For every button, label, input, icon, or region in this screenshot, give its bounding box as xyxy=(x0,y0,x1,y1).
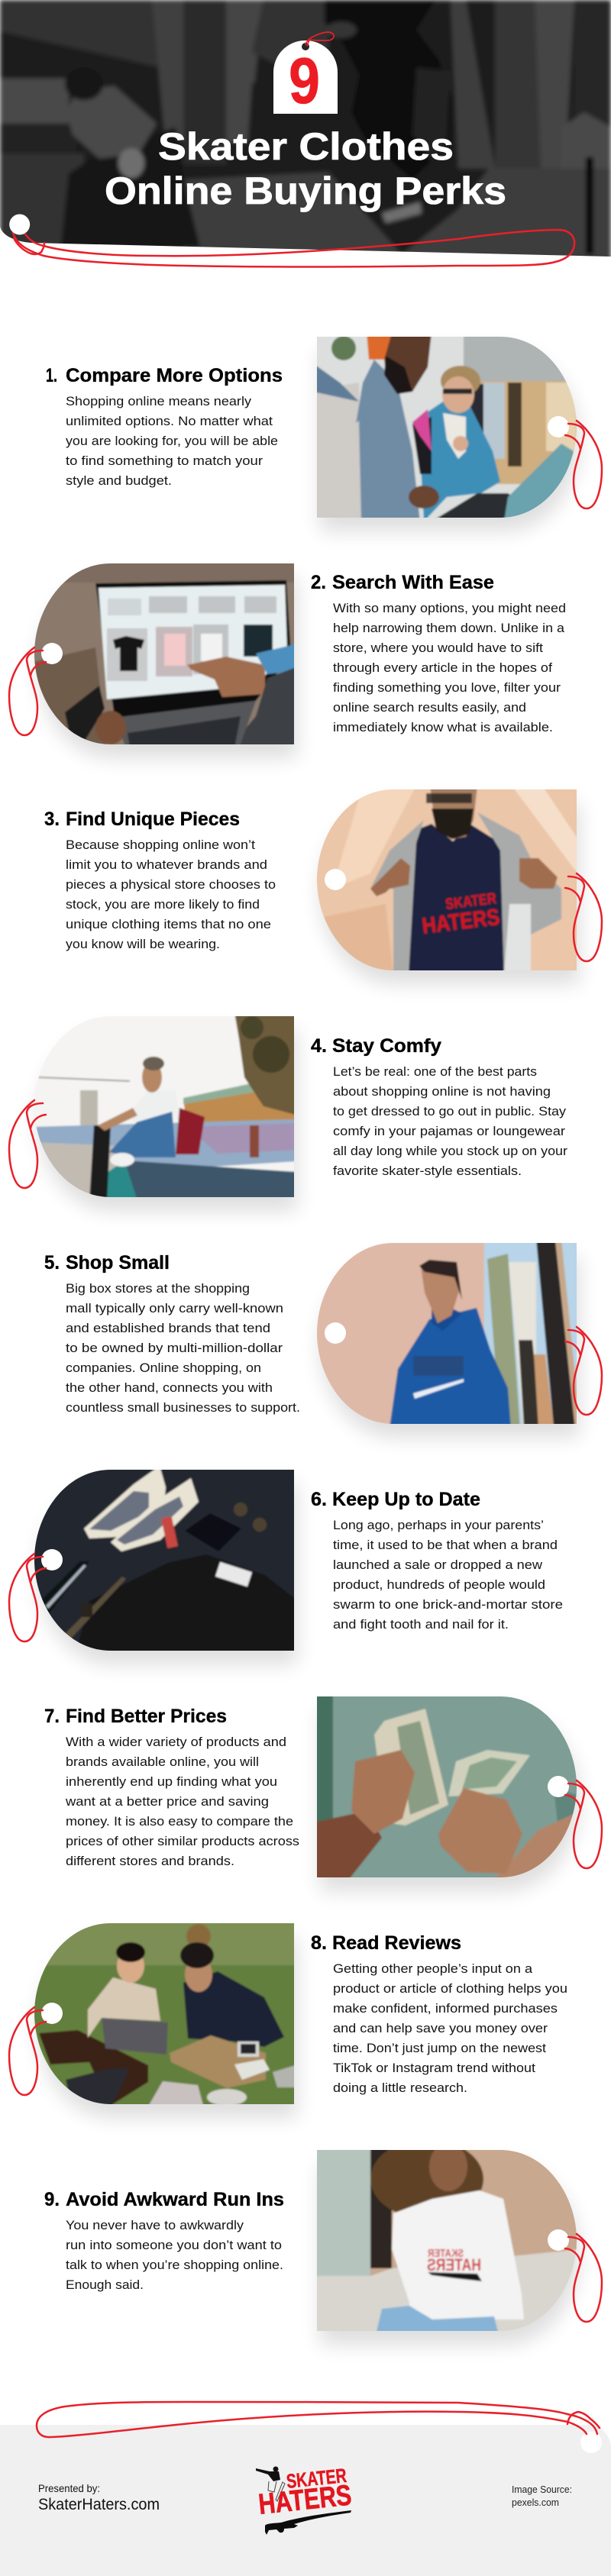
body text 6: swarm to one brick-and-mortar store xyxy=(333,1597,563,1612)
heading 7: Find Better Prices xyxy=(66,1706,227,1727)
section 7: find better prices xyxy=(44,1693,602,1891)
heading 2: 2. xyxy=(311,572,326,593)
body text 5: and established brands that tend xyxy=(66,1321,270,1335)
footer red string loop xyxy=(37,2402,600,2437)
hole 8 xyxy=(41,2003,63,2024)
body text 4: all day long while you stock up on your xyxy=(333,1144,567,1158)
body text 8: and can help save you money over xyxy=(333,2021,548,2035)
hole 2 xyxy=(41,643,63,664)
hole 5 xyxy=(325,1322,346,1344)
body text 1: you are looking for, you will be able xyxy=(66,434,278,448)
heading 5: 5. xyxy=(44,1252,60,1273)
price tag with number 9 xyxy=(273,32,338,118)
body text 5: mall typically only carry well-known xyxy=(66,1301,283,1315)
section 5: shop small xyxy=(44,1239,602,1438)
heading 4: Stay Comfy xyxy=(332,1035,441,1057)
body text 5 xyxy=(66,1281,300,1415)
body text 5: countless small businesses to support. xyxy=(66,1400,300,1415)
body text 4: to get dressed to go out in public. Stay xyxy=(333,1104,567,1119)
string 3 xyxy=(565,873,602,961)
body text 8: product or article of clothing helps you xyxy=(333,1981,567,1996)
header photo: skaters under a bridge xyxy=(0,0,611,262)
body text 3 xyxy=(66,838,276,951)
photo tag 4: skater sitting at skatepark xyxy=(9,1012,298,1211)
hole 9 xyxy=(548,2229,569,2251)
body text 8 xyxy=(333,1961,567,2095)
heading 7: 7. xyxy=(44,1706,60,1727)
body text 3: you know will be wearing. xyxy=(66,937,220,951)
body text 2: help narrowing them down. Unlike in a xyxy=(333,621,565,635)
body text 3: stock, you are more likely to find xyxy=(66,897,260,912)
body text 5: the other hand, connects you with xyxy=(66,1380,273,1395)
heading 1: Compare More Options xyxy=(66,365,283,386)
photo tag 1: two people shopping on a laptop xyxy=(313,333,602,531)
photo tag 7: hands holding cash xyxy=(313,1693,602,1891)
string 7 xyxy=(565,1780,602,1868)
body text 2 xyxy=(333,601,566,734)
heading 9: Avoid Awkward Run Ins xyxy=(66,2189,284,2210)
section 9: avoid awkward run ins xyxy=(44,2139,602,2345)
title: Skater Clothes xyxy=(158,125,454,168)
hole 1 xyxy=(548,416,569,437)
photo tag 3: man opening hoodie to show tee xyxy=(313,786,602,984)
footer panel xyxy=(0,2425,611,2576)
logo: Skater Haters: SKATER xyxy=(285,2464,348,2493)
body text 4: Let’s be real: one of the best parts xyxy=(333,1064,537,1079)
body text 8: make confident, informed purchases xyxy=(333,2001,558,2016)
heading 4: 4. xyxy=(311,1035,327,1057)
body text 6: and fight tooth and nail for it. xyxy=(333,1617,509,1632)
body text 7: want at a better price and saving xyxy=(65,1794,269,1809)
body text 9: Enough said. xyxy=(66,2277,144,2292)
body text 5: Big box stores at the shopping xyxy=(66,1281,250,1296)
heading 6: 6. xyxy=(311,1489,327,1510)
body text 4 xyxy=(333,1064,567,1178)
string 9 xyxy=(565,2234,602,2322)
image source xyxy=(512,2484,572,2508)
string 6 xyxy=(9,1554,46,1641)
body text 9: You never have to awkwardly xyxy=(66,2218,244,2232)
section 2: search with ease xyxy=(9,560,566,758)
body text 7: different stores and brands. xyxy=(66,1854,234,1868)
heading 5: Shop Small xyxy=(66,1252,170,1273)
photo tag 9: woman in white hoodie: HATERS xyxy=(427,2255,481,2274)
body text 1: to find something to match your xyxy=(66,454,263,468)
body text 3: Because shopping online won’t xyxy=(66,838,255,852)
body text 4: favorite skater-style essentials. xyxy=(333,1164,522,1178)
hole 7 xyxy=(548,1776,569,1797)
title xyxy=(105,125,506,212)
header red string loop xyxy=(13,230,574,266)
body text 2: With so many options, you might need xyxy=(333,601,566,615)
body text 7: With a wider variety of products and xyxy=(66,1735,286,1749)
section 8: read reviews xyxy=(9,1919,567,2118)
photo tag 6: flat-lay of shoes and accessories xyxy=(9,1466,298,1664)
logo: Skater Haters xyxy=(256,2464,353,2535)
heading 6: Keep Up to Date xyxy=(332,1489,480,1510)
body text 8: doing a little research. xyxy=(333,2080,467,2095)
string 4 xyxy=(9,1100,46,1188)
presented by xyxy=(38,2482,160,2513)
body text 2: finding something you love, filter your xyxy=(333,680,561,695)
photo tag 3: man opening hoodie to show tee: HATERS xyxy=(421,905,501,939)
body text 5: companies. Online shopping, on xyxy=(66,1361,261,1375)
section 1: compare more options xyxy=(46,333,602,531)
body text 7 xyxy=(65,1735,299,1868)
body text 9 xyxy=(66,2218,283,2292)
skater figure xyxy=(256,2466,285,2501)
section 4: stay comfy xyxy=(9,1012,567,1211)
heading 8: Read Reviews xyxy=(332,1932,461,1954)
body text 8: Getting other people’s input on a xyxy=(333,1961,533,1976)
body text 2: store, where you would have to sift xyxy=(333,641,543,655)
photo tag 8: two friends on grass with laptop xyxy=(9,1919,298,2118)
body text 1: unlimited options. No matter what xyxy=(66,414,273,428)
price tag with number 9: 9 xyxy=(289,45,320,118)
body text 9: talk to when you’re shopping online. xyxy=(66,2258,283,2272)
string 5 xyxy=(565,1327,602,1415)
body text 1: style and budget. xyxy=(66,473,172,488)
photo tag 9: woman in white hoodie xyxy=(313,2139,602,2345)
hole 3 xyxy=(325,869,346,890)
body text 4: about shopping online is not having xyxy=(333,1084,551,1099)
body text 8: TikTok or Instagram trend without xyxy=(333,2061,535,2075)
photo tag 5: man in blue hoodie xyxy=(313,1239,602,1438)
photo tag 3: man opening hoodie to show tee: SKATER xyxy=(445,890,498,913)
string 8 xyxy=(9,2007,46,2095)
hole 4 xyxy=(41,1096,63,1117)
body text 4: comfy in your pajamas or loungewear xyxy=(333,1124,565,1138)
logo: Skater Haters: HATERS xyxy=(257,2479,353,2521)
hole 6 xyxy=(41,1549,63,1570)
body text 6 xyxy=(333,1518,563,1632)
body text 3: limit you to whatever brands and xyxy=(66,857,267,872)
presented by: Presented by: xyxy=(38,2482,100,2494)
heading 9: 9. xyxy=(44,2189,60,2210)
brush stroke skateboard xyxy=(265,2510,351,2535)
body text 7: money. It is also easy to compare the xyxy=(66,1814,293,1829)
presented by: SkaterHaters.com xyxy=(38,2496,160,2513)
string 1 xyxy=(565,421,602,508)
image source: pexels.com xyxy=(512,2497,559,2508)
body text 6: time, it used to be that when a brand xyxy=(333,1538,558,1552)
heading 3: 3. xyxy=(44,809,60,830)
body text 3: pieces a physical store chooses to xyxy=(66,877,276,892)
heading 3: Find Unique Pieces xyxy=(66,809,240,830)
body text 1: Shopping online means nearly xyxy=(66,394,252,408)
body text 6: product, hundreds of people would xyxy=(333,1577,545,1592)
body text 7: prices of other similar products across xyxy=(66,1834,299,1848)
body text 9: run into someone you don’t want to xyxy=(66,2238,282,2252)
title: Online Buying Perks xyxy=(105,169,506,212)
photo tag 9: woman in white hoodie: SKATER xyxy=(428,2247,464,2260)
header hole xyxy=(9,214,30,235)
body text 2: through every article in the hopes of xyxy=(333,660,552,675)
heading 8: 8. xyxy=(311,1932,327,1954)
heading 1: 1. xyxy=(46,365,57,386)
body text 7: inherently end up finding what you xyxy=(66,1774,277,1789)
body text 1 xyxy=(66,394,278,488)
body text 5: to be owned by multi-million-dollar xyxy=(66,1341,283,1355)
image source: Image Source: xyxy=(512,2484,572,2495)
footer hole xyxy=(580,2432,602,2453)
body text 6: Long ago, perhaps in your parents’ xyxy=(333,1518,544,1532)
body text 2: online search results easily, and xyxy=(333,700,526,715)
section 6: keep up to date xyxy=(9,1466,563,1664)
heading 2: Search With Ease xyxy=(332,572,494,593)
body text 8: time. Don’t just jump on the newest xyxy=(333,2041,546,2055)
body text 7: brands available online, you will xyxy=(66,1754,259,1769)
body text 6: launched a sale or dropped a new xyxy=(333,1558,543,1572)
body text 3: unique clothing items that no one xyxy=(66,917,271,931)
string 2 xyxy=(9,647,46,735)
body text 2: immediately know what is available. xyxy=(333,720,553,734)
photo tag 2: laptop showing online store xyxy=(9,560,298,758)
section 3: find unique pieces xyxy=(44,786,602,984)
